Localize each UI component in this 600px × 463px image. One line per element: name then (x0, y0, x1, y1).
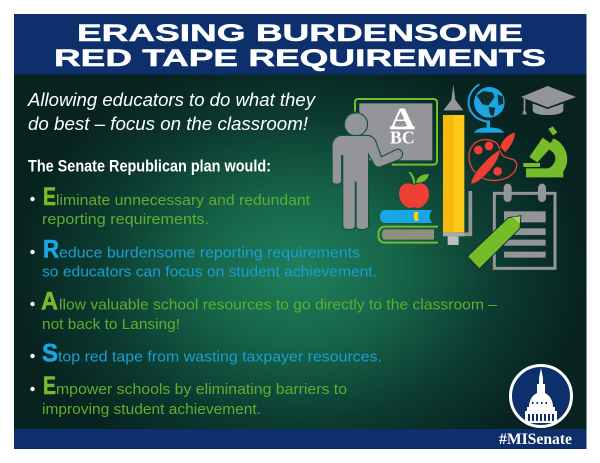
icon: palette (469, 132, 517, 184)
icon: apple (399, 172, 429, 208)
list item: Eliminate: E (43, 183, 56, 211)
list item: Empower: E (43, 372, 56, 400)
list item: Allow: llow valuable school resources to go directly to the classroom – (59, 296, 498, 314)
list item: Stop (30, 340, 382, 368)
icon: capitol seal (510, 366, 572, 426)
list item: Eliminate (30, 183, 311, 228)
icon: teacher (333, 113, 402, 229)
icon: graduation cap (521, 86, 576, 115)
panel: title banner (14, 14, 586, 74)
list item: Stop: S (42, 340, 58, 368)
list item: Eliminate: reporting requirements. (42, 211, 209, 228)
list item: Reduce: so educators can focus on student achievement. (42, 264, 377, 280)
list item: Empower: mpower schools by eliminating barriers to (56, 381, 347, 398)
plan heading: The Senate Republican plan would: (28, 158, 271, 176)
icon: microscope (523, 126, 567, 177)
list item: Reduce: R (43, 236, 59, 264)
list item: Reduce: educe burdensome reporting requirements (59, 244, 360, 262)
icon: pencil (443, 84, 470, 245)
panel: footer bar (14, 429, 586, 449)
icon: highlighter (467, 216, 521, 269)
icon: chalkboard: A (390, 104, 415, 135)
subtitle (27, 90, 316, 134)
list item: Allow: not back to Lansing! (42, 316, 180, 333)
hashtag: #MISenate (499, 431, 572, 448)
subtitle: do best – focus on the classroom! (28, 114, 308, 134)
icon: clipboard (494, 184, 555, 268)
list item: Stop: top red tape from wasting taxpayer resources. (58, 348, 382, 366)
title: ERASING BURDENSOME (77, 20, 523, 47)
subtitle: Allowing educators to do what they (27, 90, 316, 110)
icons cluster (333, 84, 576, 269)
title: RED TAPE REQUIREMENTS (54, 45, 546, 72)
list item: Reduce (30, 236, 377, 280)
list item: Eliminate: liminate unnecessary and redundant (56, 192, 311, 209)
icon: chalkboard (355, 99, 437, 165)
icon: chalkboard: BC (390, 128, 415, 148)
list item: Allow (30, 288, 498, 333)
icon: globe (469, 84, 505, 133)
list item: Empower: improving student achievement. (42, 401, 261, 418)
list item: Allow: A (41, 288, 58, 316)
list item: Empower (30, 372, 347, 418)
icon: books (378, 210, 438, 243)
title (54, 20, 546, 72)
